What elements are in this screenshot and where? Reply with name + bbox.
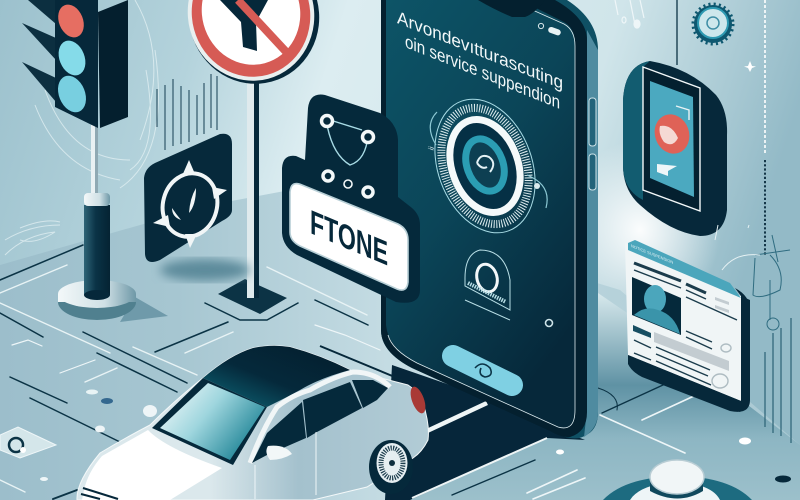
id card stamps xyxy=(712,344,731,388)
circular dial on screen xyxy=(417,85,553,247)
red lamp xyxy=(54,1,88,41)
phone screen xyxy=(386,0,575,428)
screen headline: Arvondevıtturascuting xyxy=(397,7,563,93)
dial sign shadow xyxy=(160,259,250,281)
car white pillar trim xyxy=(250,372,390,463)
note doodles top xyxy=(615,0,644,28)
road white stripes xyxy=(412,403,547,498)
car grille xyxy=(81,488,118,499)
dial sign panel xyxy=(144,134,232,262)
top medal icon xyxy=(694,5,732,43)
phone screen edge highlight xyxy=(388,8,575,428)
FTONE sign xyxy=(282,95,420,303)
phone frame xyxy=(381,0,598,438)
id card lines xyxy=(633,263,737,385)
car xyxy=(77,346,428,500)
phone side buttons xyxy=(589,98,596,190)
push button xyxy=(603,460,752,500)
right phone card xyxy=(623,61,727,236)
right floor xyxy=(410,293,800,500)
car roof xyxy=(203,346,350,407)
card body xyxy=(623,61,727,236)
phone xyxy=(381,0,598,438)
card alert glyph xyxy=(660,126,678,144)
card device screen xyxy=(650,81,694,197)
car windshield xyxy=(160,383,265,460)
id card grey bars xyxy=(654,297,729,371)
dark road under the phone and car xyxy=(385,365,585,500)
floor xyxy=(0,190,800,500)
car door seam xyxy=(255,432,316,499)
FTONE pins and circuit xyxy=(322,116,374,197)
traffic light housing xyxy=(22,0,128,128)
car side windows xyxy=(252,380,388,463)
id card body xyxy=(625,243,741,401)
traffic light pole xyxy=(58,125,168,322)
right vertical lines xyxy=(765,318,791,443)
id card photo xyxy=(632,277,681,335)
card corner bracket xyxy=(676,106,689,120)
id card shadow xyxy=(628,250,750,412)
dial gear xyxy=(153,160,227,248)
blue lamp upper xyxy=(54,37,90,79)
traffic light xyxy=(22,0,168,322)
car wheel xyxy=(369,440,413,494)
screen subheadline: oin service suppendion xyxy=(405,31,560,113)
blue lamp lower xyxy=(53,72,91,116)
screen button xyxy=(453,356,512,385)
sign slash xyxy=(238,0,290,56)
id card header text: NOTICE SUSPENSION xyxy=(631,243,673,265)
FTONE sign panel xyxy=(282,95,420,303)
car windshield frame xyxy=(152,378,267,465)
dotted guide line xyxy=(764,0,766,255)
sign pole xyxy=(218,78,287,314)
card red alert circle xyxy=(649,109,695,159)
dial sign hanging lines xyxy=(157,74,217,150)
no-turn road sign xyxy=(173,0,334,314)
small timer icon xyxy=(465,250,510,320)
id card header xyxy=(628,240,741,298)
sign arrow xyxy=(220,0,268,51)
floor road markings xyxy=(0,245,694,499)
background glow xyxy=(560,140,720,320)
phone notch xyxy=(478,0,545,17)
small floor dots xyxy=(40,390,791,482)
FTONE label plate xyxy=(290,184,408,290)
floor badge xyxy=(0,427,56,458)
circular dial on screen: ii xyxy=(427,145,436,152)
card device frame xyxy=(643,67,700,211)
car mirror xyxy=(266,446,292,460)
phone bezel xyxy=(381,0,587,437)
wall scribbles and rings xyxy=(5,0,158,255)
car body xyxy=(77,346,428,500)
car rear spoiler line xyxy=(320,346,402,380)
id card xyxy=(625,240,750,412)
car tail light xyxy=(408,385,428,415)
sparkle xyxy=(744,61,756,72)
small screen dot xyxy=(546,320,552,326)
sketch compass icon xyxy=(715,225,790,330)
card small tag xyxy=(657,164,677,176)
hanging line xyxy=(676,0,678,65)
dial sign xyxy=(144,134,250,281)
car hood xyxy=(82,430,222,500)
status icons xyxy=(538,23,562,36)
FTONE label text: FTONE xyxy=(310,202,388,273)
sign disc xyxy=(174,0,334,99)
